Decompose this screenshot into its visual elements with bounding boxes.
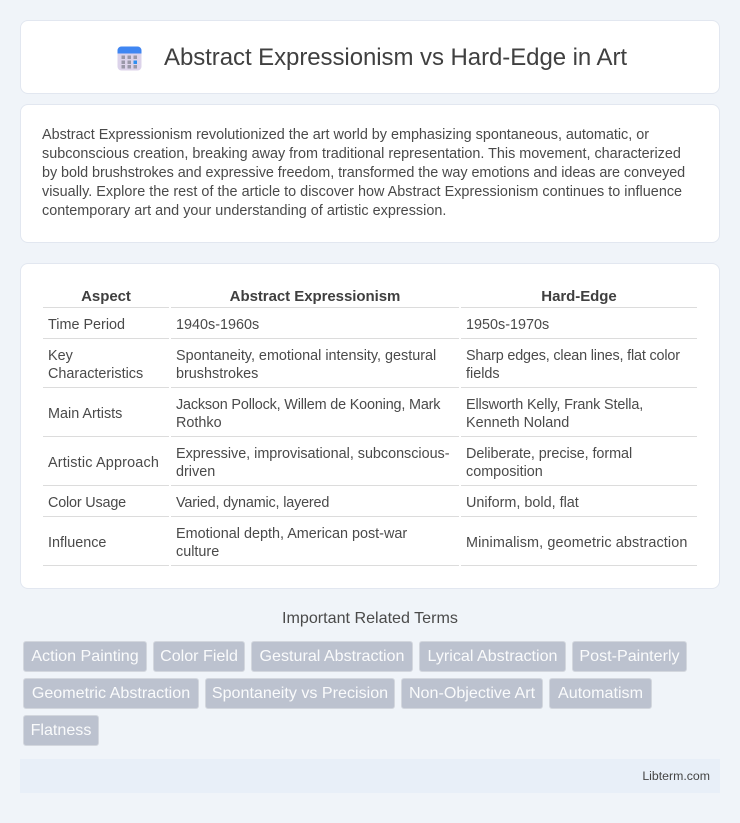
table header: hard-edge: Hard-Edge [541,288,617,305]
row: key characteristics: Key [48,348,73,364]
footer bar [20,759,720,793]
row: time period: 1940s-1960s [176,317,259,333]
row: artistic approach: Expressive, improvisational, subconscious- [176,446,450,462]
tag [419,641,566,672]
intro paragraph: by bold brushstrokes and expressive freedom, transformed the way emotions and ideas are conveyed [42,165,685,181]
tag: Geometric Abstraction [32,684,190,702]
row: key characteristics: Spontaneity, emotional intensity, gestural [176,348,436,364]
tag [549,678,652,709]
row: influence: culture [176,544,219,560]
intro paragraph: visually. Explore the rest of the article to discover how Abstract Expressionism continues to influence [42,184,682,200]
row: main artists [48,397,643,431]
related term tags [23,641,687,746]
row: main artists: Main Artists [48,406,122,422]
row: color usage: Color Usage [48,495,126,511]
tag: Post-Painterly [579,647,680,665]
row: influence: Minimalism, geometric abstraction [466,535,688,551]
tag [572,641,687,672]
table header: aspect: Aspect [81,288,131,305]
tag: Non-Objective Art [409,684,535,702]
row: color usage: Uniform, bold, flat [466,495,579,511]
row: key characteristics: fields [466,366,500,382]
intro paragraph [42,127,685,219]
tag: Color Field [160,647,238,665]
row: time period [48,317,549,333]
row: influence: Influence [48,535,106,551]
tag [251,641,413,672]
row: artistic approach: driven [176,464,215,480]
row: key characteristics: Sharp edges, clean lines, flat color [466,348,680,364]
row: artistic approach [48,446,632,480]
intro paragraph: contemporary art and your understanding of artistic expression. [42,203,446,219]
row: time period: Time Period [48,317,125,333]
intro paragraph: subconscious creation, breaking away from traditional representation. This movement, characterized [42,146,681,162]
row: color usage [48,495,579,511]
row: influence: Emotional depth, American post-war [176,526,407,542]
tag [23,678,199,709]
tag [23,641,147,672]
row: artistic approach: Deliberate, precise, formal [466,446,632,462]
tag [153,641,245,672]
comparison table card [20,263,720,589]
tag: Action Painting [31,647,139,665]
related terms heading: Important Related Terms [282,609,458,627]
icon: calendar [118,46,142,70]
row: influence [48,526,688,560]
row: main artists: Rothko [176,415,222,431]
intro paragraph: Abstract Expressionism revolutionized the art world by emphasizing spontaneous, automatic, or [42,127,649,143]
row: main artists: Kenneth Noland [466,415,569,431]
row: key characteristics: Characteristics [48,366,143,382]
tag [205,678,395,709]
row: artistic approach: Artistic Approach [48,455,159,471]
tag: Lyrical Abstraction [428,647,558,665]
row: color usage: Varied, dynamic, layered [176,495,329,511]
tag [23,715,99,746]
footer credit: Libterm.com [642,769,710,783]
intro card [20,104,720,243]
row: main artists: Ellsworth Kelly, Frank Stella, [466,397,643,413]
row: key characteristics: brushstrokes [176,366,258,382]
table header: abstract expressionism: Abstract Expressionism [230,288,400,305]
row: main artists: Jackson Pollock, Willem de Kooning, Mark [176,397,440,413]
tag: Flatness [31,721,91,739]
header card [20,20,720,94]
title: Abstract Expressionism vs Hard-Edge in Art [164,44,627,71]
row: artistic approach: composition [466,464,543,480]
row: key characteristics [48,348,680,382]
tag: Spontaneity vs Precision [212,684,388,702]
tag [401,678,543,709]
tag: Gestural Abstraction [260,647,404,665]
tag: Automatism [558,684,643,702]
row: time period: 1950s-1970s [466,317,549,333]
